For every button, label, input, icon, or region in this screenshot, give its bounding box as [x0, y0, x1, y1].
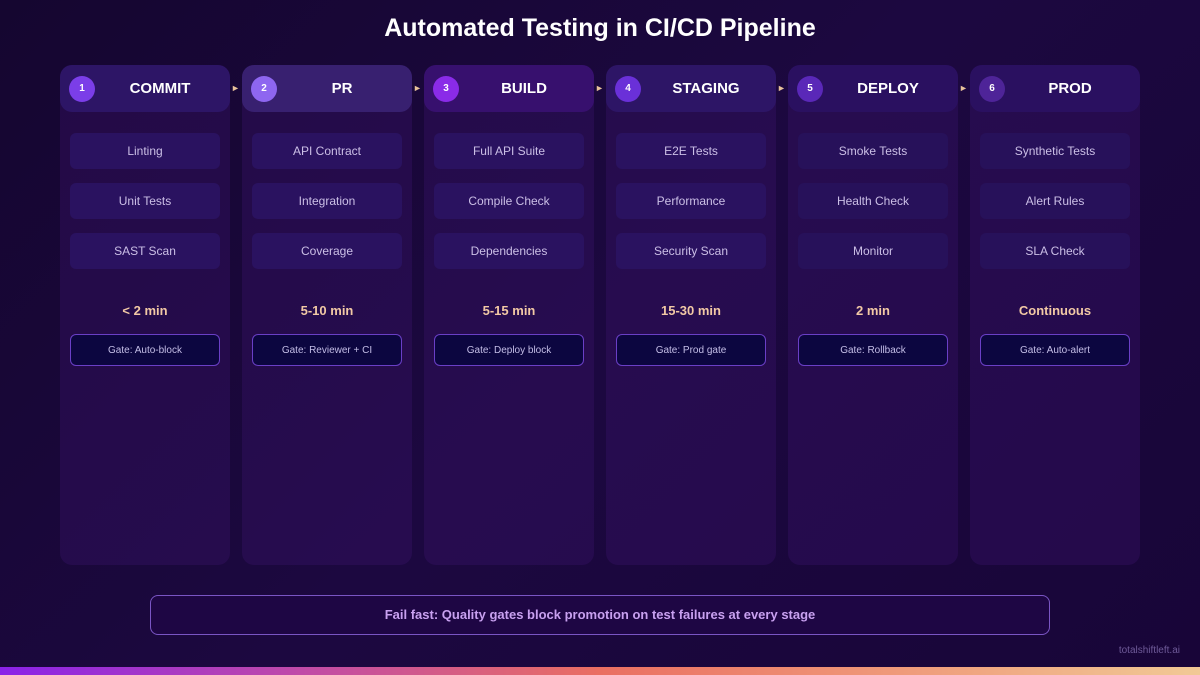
item: Unit Tests [119, 194, 171, 208]
time: 2 min [856, 303, 890, 318]
header: prod: PROD [1048, 80, 1092, 97]
item: Health Check [837, 194, 909, 208]
arrow: ► [595, 83, 604, 93]
item [798, 183, 948, 219]
arrow: ► [413, 83, 422, 93]
header: pr: PR [332, 80, 352, 97]
item: Performance [657, 194, 725, 208]
header: build [424, 65, 594, 112]
header: build: 3 [443, 83, 449, 94]
item: Security Scan [654, 244, 728, 258]
brand: totalshiftleft.ai [1119, 645, 1180, 656]
header: commit [60, 65, 230, 112]
gate: Gate: Auto-alert [1020, 345, 1090, 356]
item: Dependencies [471, 244, 547, 258]
gate [70, 334, 220, 366]
column: staging [606, 65, 776, 565]
item [252, 233, 402, 269]
item [252, 133, 402, 169]
header: pr: 2 [261, 83, 267, 94]
item [980, 133, 1130, 169]
header: pr [242, 65, 412, 112]
item [434, 233, 584, 269]
item [70, 233, 220, 269]
item [434, 133, 584, 169]
time: < 2 min [122, 303, 168, 318]
item [252, 183, 402, 219]
item: Integration [299, 194, 355, 208]
item: SLA Check [1025, 244, 1085, 258]
header: staging [606, 65, 776, 112]
column: pr [242, 65, 412, 565]
item [616, 183, 766, 219]
column: commit [60, 65, 230, 565]
header: build: BUILD [501, 80, 547, 97]
header: commit: 1 [79, 83, 85, 94]
arrow: ► [231, 83, 240, 93]
item [70, 133, 220, 169]
gate: Gate: Reviewer + CI [282, 345, 372, 356]
header: deploy: 5 [807, 83, 813, 94]
time: 5-15 min [483, 303, 535, 318]
item [798, 133, 948, 169]
item: API Contract [293, 144, 361, 158]
title: Automated Testing in CI/CD Pipeline [384, 14, 816, 42]
gradient bar [0, 667, 1200, 675]
gate [616, 334, 766, 366]
header: commit: COMMIT [130, 80, 190, 97]
item: Smoke Tests [839, 144, 907, 158]
item: Coverage [301, 244, 353, 258]
header: prod: 6 [989, 83, 995, 94]
item [434, 183, 584, 219]
arrow: ► [777, 83, 786, 93]
item [70, 183, 220, 219]
header: deploy [788, 65, 958, 112]
gate: Gate: Auto-block [108, 345, 182, 356]
gate: Gate: Deploy block [467, 345, 551, 356]
item: E2E Tests [664, 144, 718, 158]
time: 15-30 min [661, 303, 721, 318]
item: Compile Check [468, 194, 550, 208]
gate: Gate: Prod gate [656, 345, 726, 356]
column: prod [970, 65, 1140, 565]
item [798, 233, 948, 269]
callout: fail fast [150, 595, 1050, 635]
item: Alert Rules [1026, 194, 1084, 208]
item: Linting [127, 144, 163, 158]
item: Full API Suite [473, 144, 545, 158]
item: SAST Scan [114, 244, 176, 258]
item [980, 183, 1130, 219]
time: 5-10 min [301, 303, 353, 318]
gate: Gate: Rollback [840, 345, 906, 356]
callout: fail fast: Fail fast: Quality gates block promotion on test failures at every stage [385, 607, 815, 622]
time: Continuous [1019, 303, 1091, 318]
item: Monitor [853, 244, 893, 258]
header: staging: 4 [625, 83, 631, 94]
gate [980, 334, 1130, 366]
item [980, 233, 1130, 269]
item: Synthetic Tests [1015, 144, 1095, 158]
arrow: ► [959, 83, 968, 93]
column: deploy [788, 65, 958, 565]
header: prod [970, 65, 1140, 112]
gate [252, 334, 402, 366]
item [616, 133, 766, 169]
header: staging: STAGING [672, 80, 740, 97]
gate [434, 334, 584, 366]
item [616, 233, 766, 269]
gate [798, 334, 948, 366]
column: build [424, 65, 594, 565]
header: deploy: DEPLOY [857, 80, 919, 97]
